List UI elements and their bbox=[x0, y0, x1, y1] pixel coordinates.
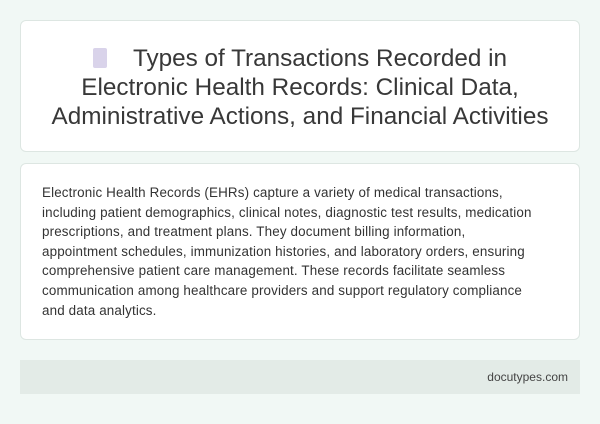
description text: Electronic Health Records (EHRs) capture a variety of medical transactions, bbox=[42, 185, 503, 200]
icon: receipt bbox=[93, 48, 107, 68]
title: Administrative Actions, and Financial Activities bbox=[52, 103, 548, 130]
description text: including patient demographics, clinical notes, diagnostic test results, medication bbox=[42, 205, 532, 220]
header card bbox=[20, 20, 580, 152]
title: Types of Transactions Recorded in bbox=[133, 45, 507, 72]
description text: appointment schedules, immunization histories, and laboratory orders, ensuring bbox=[42, 244, 525, 259]
footer bbox=[20, 360, 580, 394]
footer: docutypes.com bbox=[487, 370, 568, 384]
description text: and data analytics. bbox=[42, 303, 157, 318]
description text bbox=[42, 185, 532, 318]
description text: communication among healthcare providers and support regulatory compliance bbox=[42, 283, 522, 298]
title: Electronic Health Records: Clinical Data, bbox=[81, 74, 519, 101]
title bbox=[52, 45, 548, 130]
description text: prescriptions, and treatment plans. They document billing information, bbox=[42, 224, 465, 239]
description text: comprehensive patient care management. These records facilitate seamless bbox=[42, 263, 505, 278]
description card bbox=[20, 163, 580, 340]
